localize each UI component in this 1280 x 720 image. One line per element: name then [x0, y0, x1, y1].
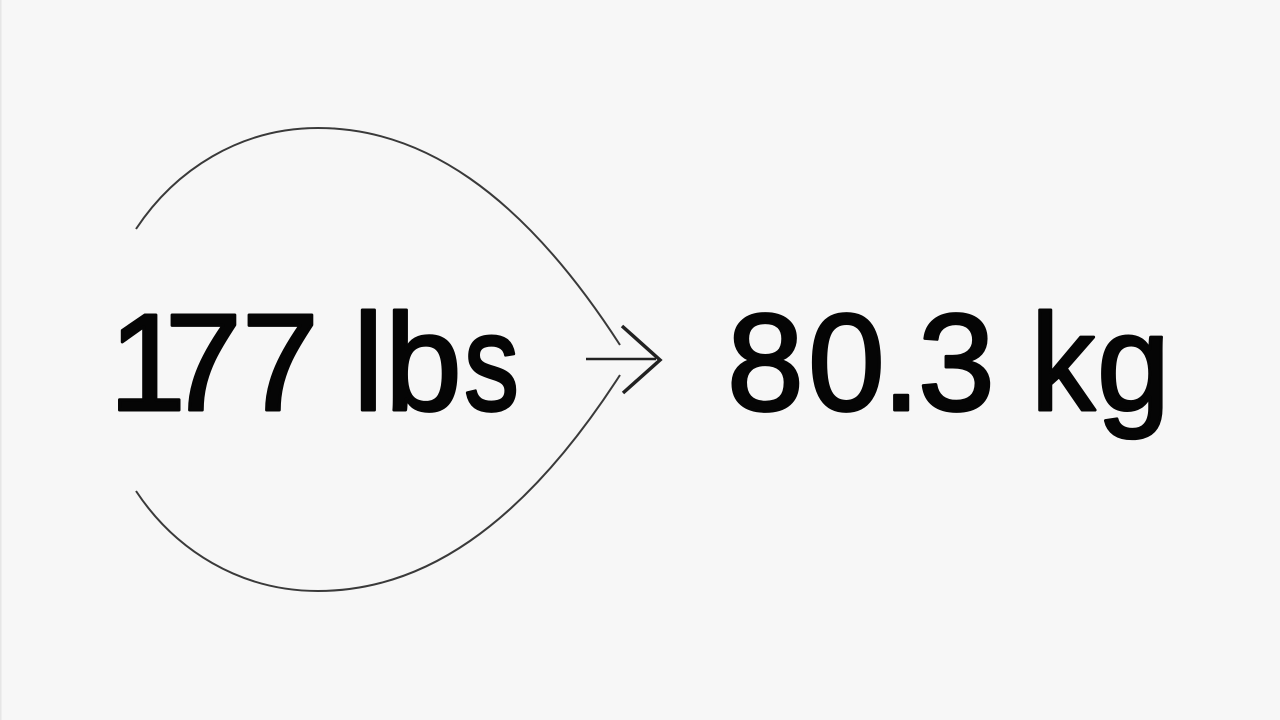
arrow shaft [586, 358, 656, 360]
lower curved arc [136, 375, 620, 591]
value in kilograms: k [1031, 286, 1096, 440]
upper curved arc [136, 128, 620, 345]
value in kilograms: g [1097, 286, 1170, 440]
value in pounds: 177 lb [109, 286, 462, 440]
left edge line [0, 0, 2, 720]
value in pounds: s [464, 286, 519, 440]
value in kilograms: 80.3 [727, 286, 1033, 440]
arrow [586, 326, 660, 393]
arrow head [622, 326, 660, 393]
